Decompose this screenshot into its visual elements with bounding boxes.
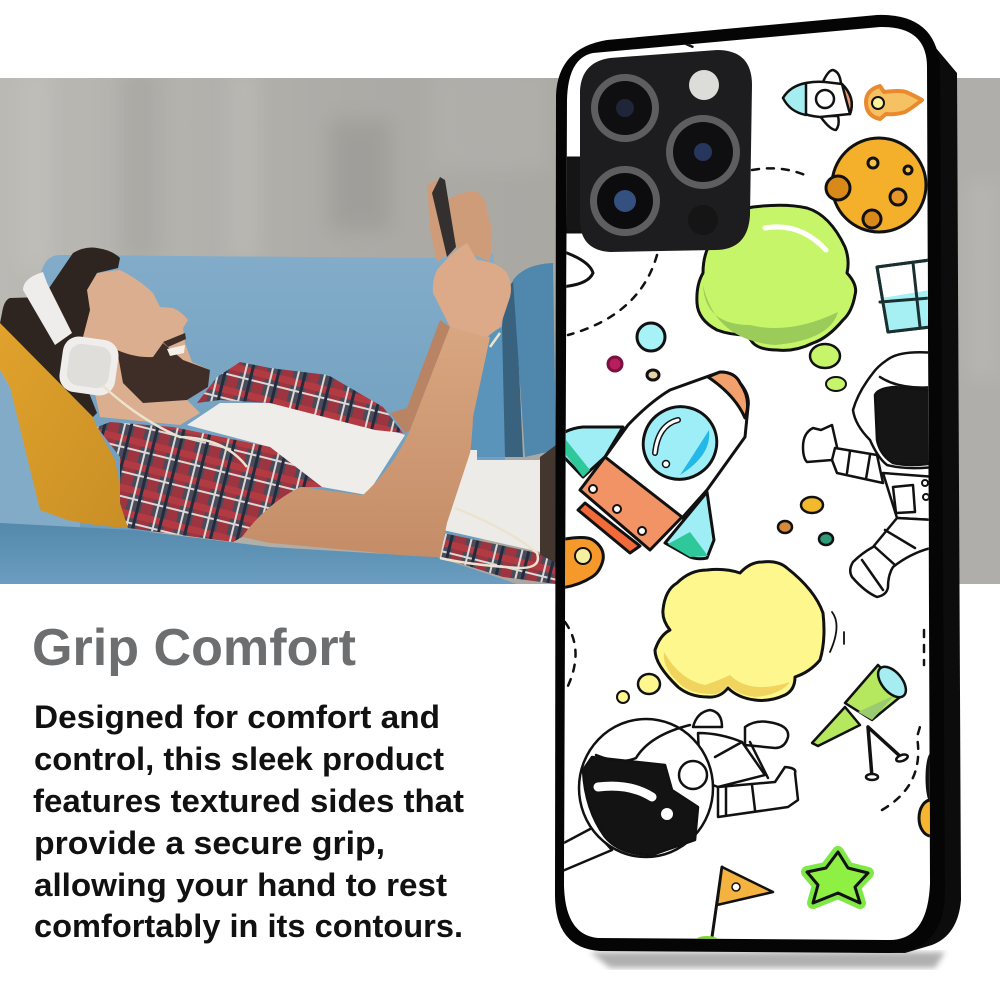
photo: sofa dark gap	[502, 280, 523, 457]
photo: jeans and belt	[540, 445, 556, 563]
left fin	[560, 427, 623, 477]
illustration: partial dark shape behind camera	[566, 156, 582, 234]
photo: white t-shirt chest	[187, 403, 405, 495]
flash	[689, 70, 719, 100]
lens right	[666, 115, 740, 189]
photo: hand with phone	[427, 177, 511, 337]
visor glare	[598, 786, 652, 797]
title: Grip Comfort	[32, 619, 356, 677]
illustration: small rocket top	[783, 70, 852, 130]
text block: description	[33, 699, 464, 944]
illustration: flag	[696, 867, 773, 944]
lower leg	[718, 767, 798, 817]
illustration: astronaut right	[803, 352, 935, 597]
helmet ring	[679, 761, 707, 789]
illustration: telescope	[812, 662, 911, 780]
text block: description: provide a secure grip,	[34, 825, 385, 861]
photo: sofa side cushion	[513, 263, 556, 457]
photo: yellow pillow	[0, 323, 128, 528]
photo: back forearm	[390, 320, 450, 433]
photo: sofa seat	[0, 523, 517, 584]
illustration: orange edge shape	[919, 800, 943, 836]
photo: wall texture	[128, 78, 386, 252]
illustration: green star	[807, 852, 868, 903]
photo: moustache and smile	[163, 333, 186, 356]
case side wall	[600, 15, 961, 953]
text block: description: Designed for comfort and	[34, 699, 440, 735]
knee	[745, 722, 788, 748]
rocket body	[605, 372, 748, 518]
sensor	[688, 205, 718, 235]
rocket nose	[708, 372, 748, 418]
case printed face	[564, 27, 930, 940]
photo: plaid shirt body	[97, 422, 322, 542]
upper hand	[427, 180, 492, 262]
torso	[883, 473, 935, 520]
illustration: small colored dots	[778, 497, 833, 545]
illustration: gift box	[877, 260, 930, 332]
photo: hair	[0, 248, 120, 417]
photo: concrete wall	[0, 78, 1000, 584]
photo: sofa left arm	[0, 370, 80, 530]
illustration: large rocket	[560, 372, 748, 559]
illustration: orange planet	[826, 138, 926, 232]
illustration: astronaut bottom	[560, 710, 798, 872]
torso	[698, 733, 765, 787]
lens bottom left	[590, 166, 660, 236]
photo: plaid shirt shoulder	[197, 362, 403, 433]
glove	[803, 425, 837, 462]
helmet	[853, 352, 935, 468]
photo: headphones	[23, 272, 538, 568]
leg	[850, 518, 935, 597]
rear nozzle	[578, 503, 640, 553]
photo: front arm	[242, 327, 490, 557]
illustration: dashed trails lower	[565, 622, 924, 810]
illustration: green cloud	[697, 205, 856, 391]
case shadow	[590, 952, 945, 968]
illustration: dark edge shape	[927, 754, 937, 802]
photo: sofa inner blue panel	[470, 327, 507, 457]
photo: sofa backrest	[20, 253, 505, 540]
text block: description: allowing your hand to rest	[34, 867, 447, 903]
text block: description: control, this sleek product	[34, 741, 444, 777]
illustration: small flame	[866, 86, 922, 119]
illustration: flame left	[560, 538, 603, 588]
panel: lifestyle photo	[0, 70, 1000, 584]
text block: description: comfortably in its contours.	[34, 908, 463, 944]
arm	[832, 448, 883, 483]
illustration: dashed trail upper	[568, 44, 805, 335]
rocket base	[580, 457, 682, 550]
case body	[555, 15, 945, 953]
window	[630, 393, 730, 493]
lower fin	[665, 492, 714, 559]
lower hand	[433, 243, 511, 337]
photo: plaid shirt hem	[440, 533, 556, 584]
illustration: partial shape at left	[560, 253, 593, 287]
photo: beard	[117, 343, 210, 403]
base rivets	[589, 485, 646, 535]
held smartphone	[432, 177, 456, 257]
text block: description: features textured sides that	[33, 783, 464, 819]
backpack	[693, 710, 722, 727]
helmet	[579, 719, 713, 857]
lens top left	[591, 74, 659, 142]
panel: phone case	[555, 15, 961, 968]
illustration: bubble dots	[608, 323, 665, 380]
phone artwork	[560, 44, 943, 944]
astronaut arm	[560, 828, 612, 872]
photo: white t-shirt waist	[443, 450, 540, 552]
photo: face and neck	[83, 270, 210, 425]
camera island	[580, 50, 752, 252]
visor	[583, 757, 698, 855]
illustration: yellow cloud	[617, 562, 844, 703]
